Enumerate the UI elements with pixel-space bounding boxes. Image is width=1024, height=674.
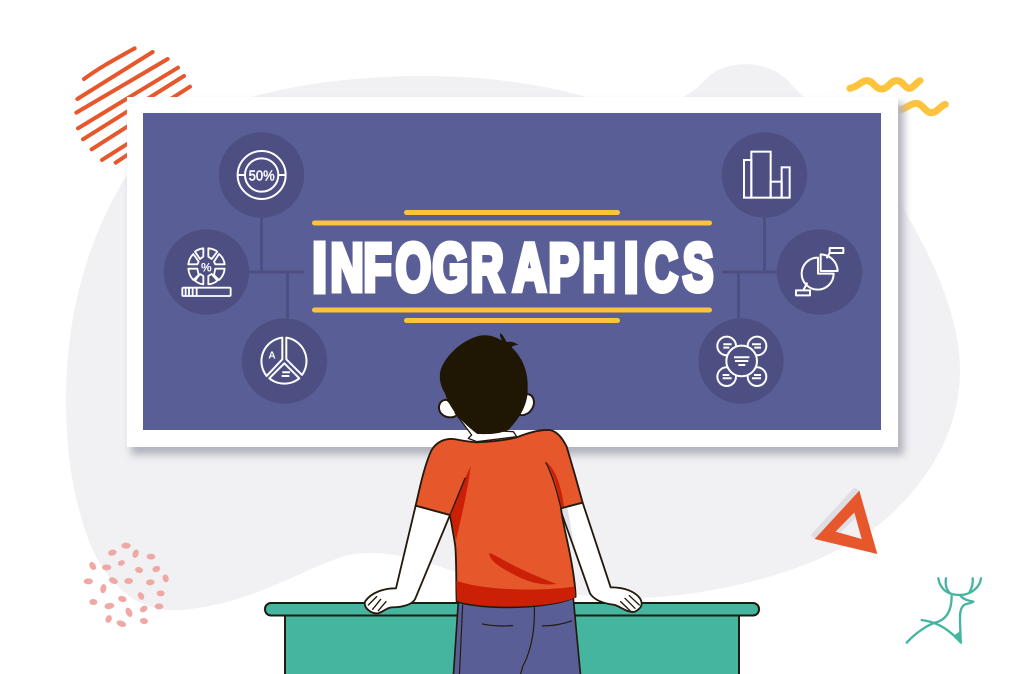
yellow squiggle lower [898, 103, 945, 113]
shirt hem shade [456, 581, 575, 607]
shirt fold left [451, 466, 471, 540]
desk [265, 603, 759, 674]
board shadow [131, 103, 904, 455]
left connectors [249, 217, 304, 318]
right fingers [621, 596, 639, 611]
board panel [143, 113, 881, 430]
icon: percent wheel with progress bar: % [201, 260, 212, 274]
ears [439, 394, 534, 417]
title: I [313, 231, 326, 306]
title: CS [645, 231, 713, 306]
shirt [416, 430, 583, 607]
yellow squiggle top [850, 81, 920, 89]
sleeve lines [450, 463, 561, 515]
bottom rule short [404, 318, 620, 323]
jeans [453, 598, 581, 674]
icon: pie chart with letter A: A [268, 351, 276, 362]
icon: percent wheel with progress bar [164, 229, 249, 315]
triangle decoration [811, 487, 877, 554]
pink dots [84, 543, 170, 628]
left arm [365, 506, 450, 613]
shirt fold right [547, 462, 564, 508]
icon: pie chart with labels [777, 229, 862, 315]
neck and collar [455, 412, 517, 442]
top rule short [404, 210, 620, 215]
icon: network of circles [698, 318, 784, 404]
right connectors [722, 217, 777, 318]
board frame [127, 97, 898, 447]
hair [440, 333, 528, 434]
right arm shade [561, 507, 574, 545]
person from behind [365, 333, 642, 674]
background blob [66, 64, 960, 610]
top rule long [312, 220, 712, 226]
left fingers [368, 597, 386, 611]
icon: bar chart [722, 132, 807, 218]
deer logo [907, 578, 981, 643]
striped circle decoration [76, 48, 190, 163]
icon: 50 percent gauge [219, 132, 304, 218]
title: NFOGRAPH [331, 231, 616, 306]
right arm [560, 503, 642, 612]
shirt fold lower [489, 553, 557, 584]
icon: 50 percent gauge: 50% [249, 168, 275, 184]
bottom rule long [312, 308, 712, 312]
title: I [625, 231, 637, 306]
icon: pie chart with letter A [242, 318, 327, 404]
